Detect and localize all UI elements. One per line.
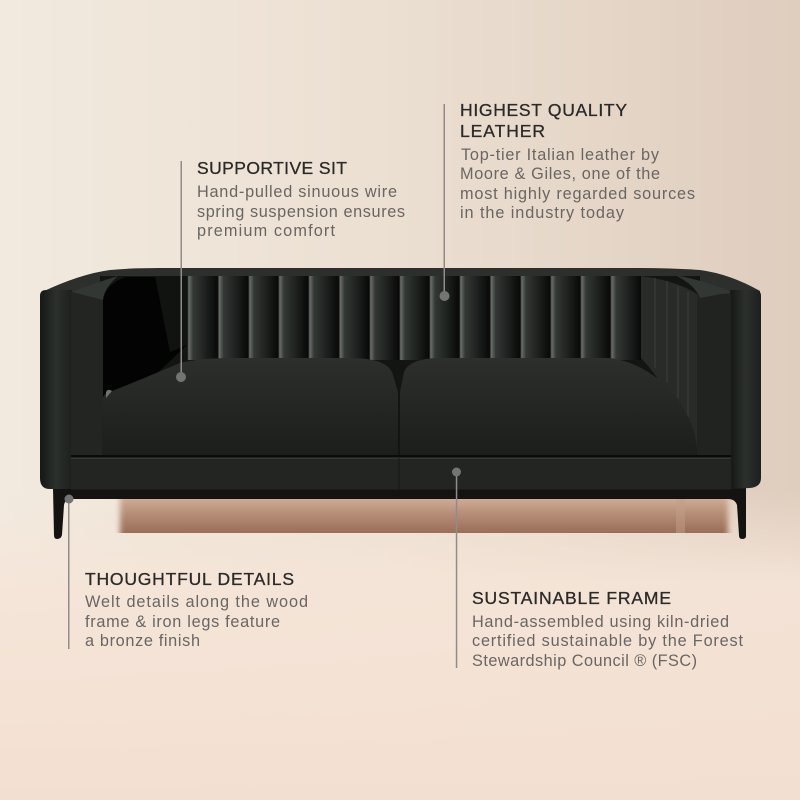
sofa legs and base rail: [53, 488, 746, 539]
text block: sustainable frame: SUSTAINABLE FRAME: [472, 588, 671, 608]
sofa: [40, 268, 761, 539]
text block: supportive sit: spring suspension ensures: [197, 203, 405, 221]
marker: highest quality leather: [440, 104, 450, 301]
text block: highest quality leather: in the industry today: [460, 204, 625, 222]
text block: sustainable frame: Hand-assembled using kiln-dried: [472, 613, 729, 631]
text block: highest quality leather: Moore & Giles, one of the: [460, 165, 660, 183]
text block: highest quality leather: Top-tier Italian leather by: [461, 146, 660, 164]
floor shadow under sofa: [116, 499, 732, 533]
marker: supportive sit: [176, 161, 186, 382]
text block: thoughtful details: THOUGHTFUL DETAILS: [85, 569, 294, 589]
text block: supportive sit: Hand-pulled sinuous wire: [197, 183, 397, 201]
text block: supportive sit: [197, 158, 405, 240]
text block: thoughtful details: Welt details along the wood: [85, 593, 308, 611]
back channel tufting: [187, 276, 641, 360]
left seat cushion: [102, 358, 398, 455]
marker: thoughtful details: [64, 494, 74, 649]
text block: supportive sit: premium comfort: [197, 222, 335, 240]
text block: highest quality leather: HIGHEST QUALITY: [460, 100, 627, 120]
left arm: [40, 276, 118, 489]
right arm: [675, 275, 761, 489]
text block: highest quality leather: LEATHER: [460, 121, 545, 141]
sofa back: [42, 268, 760, 465]
text block: thoughtful details: [85, 569, 308, 650]
text block: supportive sit: SUPPORTIVE SIT: [197, 158, 347, 178]
marker: sustainable frame: [452, 468, 461, 668]
callout lines and dots: [64, 104, 461, 668]
text block: highest quality leather: most highly regarded sources: [460, 185, 695, 203]
front base band: [71, 455, 731, 490]
text block: thoughtful details: a bronze finish: [85, 632, 200, 650]
text block: highest quality leather: [460, 100, 695, 222]
text block: sustainable frame: certified sustainable by the Forest: [472, 632, 743, 650]
text block: sustainable frame: [472, 588, 743, 670]
right seat cushion: [400, 358, 697, 455]
text block: thoughtful details: frame & iron legs feature: [85, 613, 280, 631]
text block: sustainable frame: Stewardship Council ® (FSC): [472, 652, 697, 670]
